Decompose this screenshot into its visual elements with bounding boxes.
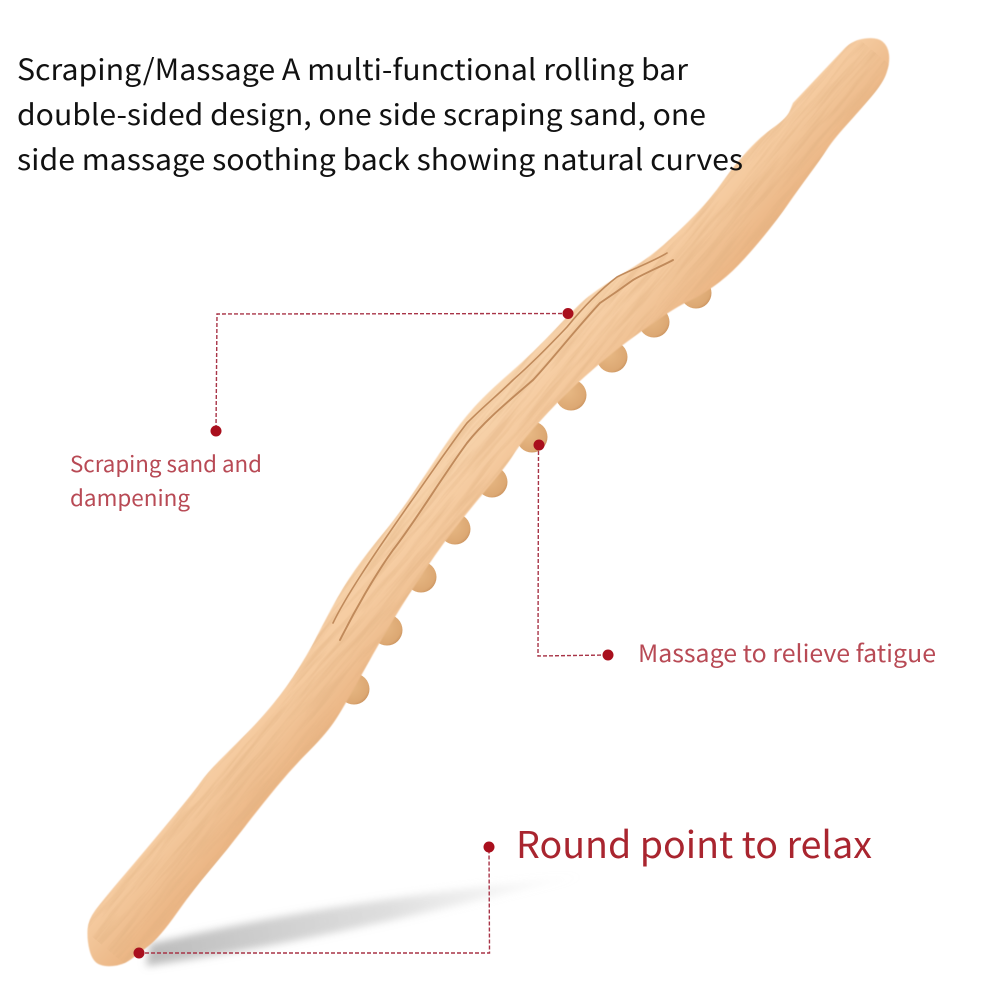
callout: round point to relax — [134, 815, 872, 958]
callout: massage to relieve fatigue — [534, 440, 936, 669]
leader line — [139, 847, 490, 953]
cast shadow — [146, 876, 585, 966]
label: Scraping sand and — [70, 447, 262, 479]
dots — [210, 308, 574, 436]
scraping grooves — [333, 253, 673, 640]
leader line — [538, 445, 608, 656]
massage knobs — [338, 278, 712, 704]
title text block: Scraping/Massage A multi-functional rolling bar — [17, 47, 689, 89]
dots — [134, 842, 494, 958]
dots — [534, 440, 614, 660]
title text block: double-sided design, one side scraping sand, one — [17, 92, 706, 134]
label: Round point to relax — [516, 815, 872, 869]
leader line — [216, 314, 568, 431]
label: dampening — [70, 481, 191, 513]
title text block: side massage soothing back showing natural curves — [17, 137, 743, 179]
label: Massage to relieve fatigue — [638, 634, 936, 669]
callout: scraping sand and dampening — [70, 308, 574, 513]
wooden body — [87, 38, 889, 966]
wood grain — [88, 40, 888, 963]
